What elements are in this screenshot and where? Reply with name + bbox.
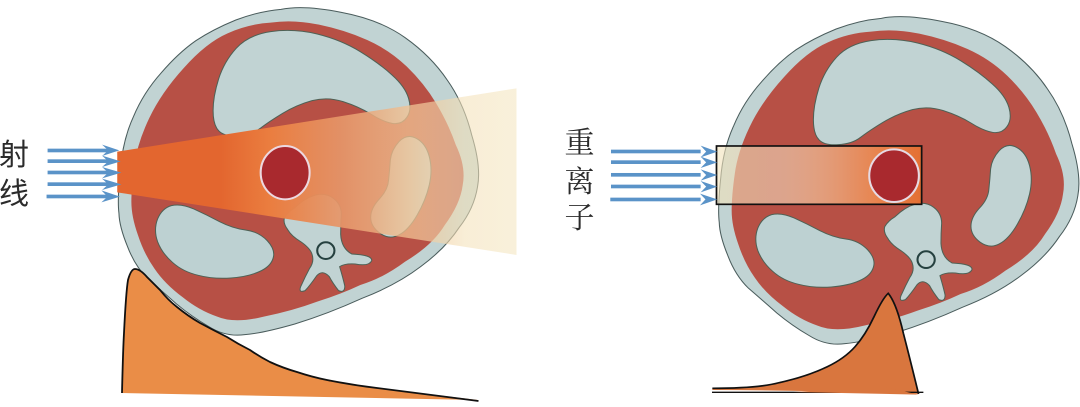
panel: right body cross-section <box>719 17 1079 344</box>
vertebra <box>284 194 372 291</box>
arrows: heavy ion incoming <box>610 146 717 205</box>
tumor: right <box>869 149 919 202</box>
body outline <box>118 8 479 335</box>
label: 重离子: 重 <box>564 127 594 160</box>
kidney <box>156 205 274 278</box>
label: 重离子: 离 <box>564 166 594 199</box>
beam: X-ray dose cone <box>117 88 517 255</box>
chart: X-ray dose curve <box>122 269 478 401</box>
label: 重离子: 子 <box>564 202 594 235</box>
tumor: left <box>261 146 310 199</box>
arrows: X-ray incoming <box>47 145 121 202</box>
beam: heavy ion box <box>716 146 922 204</box>
muscle tissue <box>131 21 464 320</box>
liver <box>213 30 410 136</box>
label: 重离子 <box>564 127 594 235</box>
label: 射线 <box>0 139 29 211</box>
spleen <box>371 136 431 237</box>
panel: left body cross-section <box>118 8 479 335</box>
spinal canal <box>317 242 334 259</box>
chart: heavy ion dose curve <box>712 293 923 395</box>
